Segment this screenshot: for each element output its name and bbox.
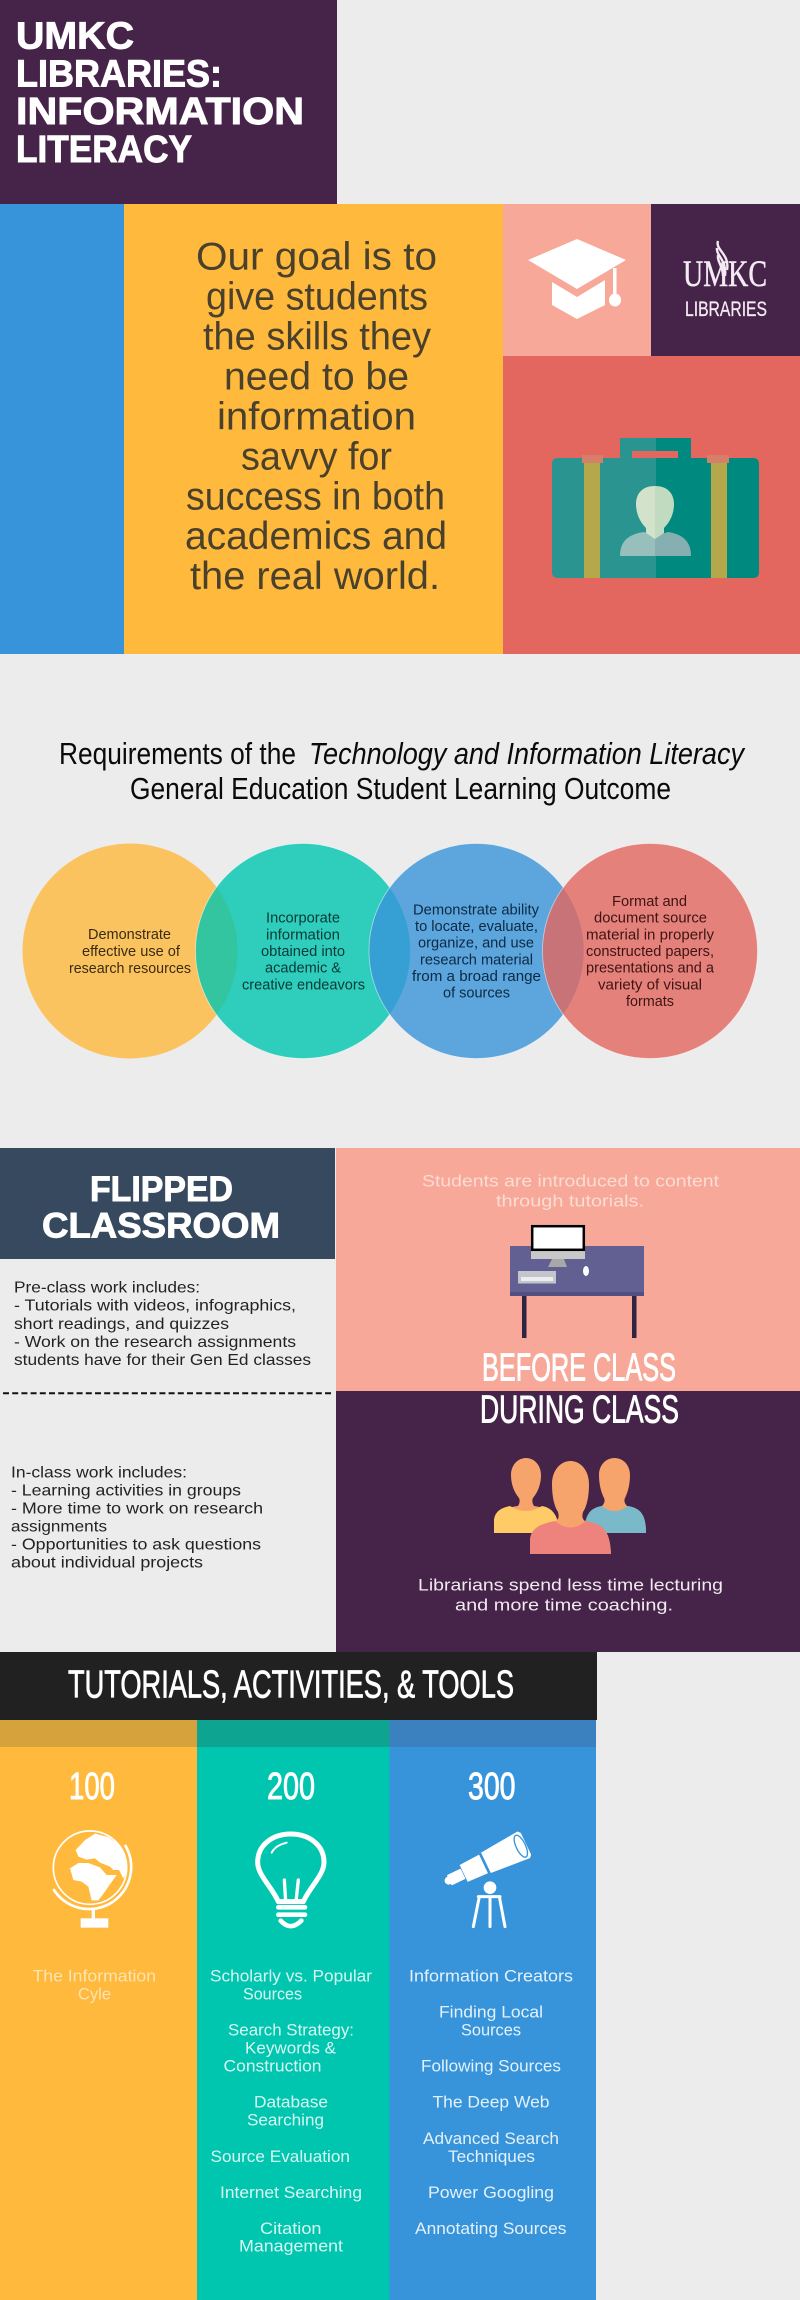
circle text: incorporate: academic & [265,960,341,977]
circle text: incorporate: creative endeavors [242,976,365,993]
panel: tutorials columns [0,1652,597,2300]
title: LIBRARIES: [16,53,222,95]
goal statement: Our goal is to [196,235,437,278]
list: level 200 tutorials: Search Strategy: [228,2021,354,2040]
icon: light bulb [258,1834,324,1926]
circle text: format and document: formats [626,993,674,1010]
list: level 200 tutorials: Source Evaluation [210,2147,350,2166]
requirements heading: Requirements of the [59,736,296,771]
logo wordmark [683,254,767,321]
icon: logo flame [717,241,727,276]
icon: telescope [439,1830,532,1927]
logo wordmark: UMKC [683,254,767,295]
list: level 200 tutorials: Keywords & [245,2038,337,2057]
icon: graduation cap [528,239,626,319]
circle text: effective use: research resources [69,960,191,977]
during class description: and more time coaching. [455,1596,673,1615]
flipped classroom title: CLASSROOM [42,1206,280,1245]
circle text: locate and evaluate: from a broad range [412,968,541,985]
heading bar: tutorials, activities and tools: TUTORIALS, ACTIVITIES, & TOOLS [68,1664,514,1707]
circle text: incorporate [242,910,365,993]
circle text: incorporate: Incorporate [266,910,340,927]
list: level 100 tutorials: Cyle [78,1984,111,2004]
panel: briefcase [503,356,800,654]
goal statement: need to be [224,355,409,398]
circle text: effective use [69,926,191,977]
during class heading: DURING CLASS [480,1389,679,1432]
list: level 200 tutorials: Internet Searching [220,2183,362,2202]
during class description [418,1576,723,1615]
circle text: locate and evaluate: to locate, evaluate, [415,918,538,935]
list: level 200 tutorials: Management [239,2237,343,2256]
text block: pre-class work: - Tutorials with videos, infographics, [14,1298,296,1315]
title: INFORMATION [16,91,304,133]
level numbers: 100 [69,1766,115,1808]
goal statement: the real world. [190,555,440,598]
before class heading: BEFORE CLASS [482,1347,676,1390]
list: level 300 tutorials: Information Creators [409,1967,573,1986]
list: level 300 tutorials: Annotating Sources [415,2219,566,2238]
flipped classroom title: FLIPPED [90,1170,233,1209]
list: level 100 tutorials [32,1967,156,2004]
level numbers: 200 [267,1766,315,1808]
goal statement: success in both [186,475,445,518]
text block: pre-class work: - Work on the research assignments [14,1334,296,1351]
circle text: format and document: presentations and a [586,960,715,977]
before class description [422,1172,719,1211]
before class description: Students are introduced to content [422,1172,719,1191]
list: level 300 tutorials: Power Googling [428,2183,554,2202]
circle text: format and document: document source [594,910,707,927]
requirements heading [59,736,746,806]
circle text: format and document: variety of visual [598,976,702,993]
text block: in-class work: assignments [11,1519,107,1536]
text block: pre-class work: short readings, and quizzes [14,1316,229,1333]
requirements heading: Technology and Information Literacy [309,736,746,771]
list: level 200 tutorials: Database [254,2093,328,2112]
heading bar: tutorials, activities and tools [0,1652,597,1720]
text block: in-class work: about individual projects [11,1555,203,1572]
list: level 300 tutorials: Advanced Search [423,2129,559,2148]
list: level 200 tutorials: Scholarly vs. Popular [210,1967,372,1986]
circle text: locate and evaluate: Demonstrate ability [413,901,539,918]
text block: pre-class work: Pre-class work includes: [14,1280,200,1297]
goal statement [185,235,447,598]
goal statement: give students [206,275,428,318]
icon: group of people [494,1458,646,1554]
goal statement: savvy for [241,435,392,478]
list: level 300 tutorials: Sources [461,2021,521,2040]
text block: in-class work: - More time to work on research [11,1500,263,1517]
circle text: locate and evaluate [412,901,541,1002]
title: UMKC [16,15,134,57]
icon: desk with computer [510,1226,644,1338]
text block: in-class work [11,1464,263,1572]
circle text: format and document [586,893,715,1010]
text block: in-class work: - Learning activities in groups [11,1482,241,1499]
list: level 300 tutorials: The Deep Web [432,2093,550,2112]
circle text: incorporate: information [266,926,340,943]
text block: pre-class work: students have for their Gen Ed classes [14,1352,311,1369]
circle text: locate and evaluate: organize, and use [418,935,534,952]
chart: four overlapping outcome circles [22,844,758,1058]
text block: pre-class work [14,1280,311,1369]
list: level 200 tutorials: Citation [260,2219,322,2238]
level numbers [69,1766,516,1808]
panel: UMKC Libraries logo [651,204,800,356]
panel: during class [336,1389,800,1652]
title [16,15,304,171]
goal statement: academics and [185,515,447,558]
list: level 200 tutorials: Searching [247,2110,324,2130]
circle text: effective use: effective use of [82,943,181,960]
before class description: through tutorials. [496,1192,644,1211]
text block: in-class work: - Opportunities to ask questions [11,1537,261,1554]
circle text: format and document: material in properly [586,926,714,943]
list: level 200 tutorials: Construction [224,2057,322,2076]
circle text: locate and evaluate: of sources [443,985,510,1002]
title: LITERACY [16,129,192,171]
text block: in-class work: In-class work includes: [11,1464,187,1481]
goal statement: the skills they [203,315,431,358]
requirements heading: General Education Student Learning Outcome [130,771,671,806]
panel: goal hero [0,204,503,654]
icon: globe [53,1831,131,1928]
during class description: Librarians spend less time lecturing [418,1576,723,1595]
panel: graduation cap [503,204,651,356]
list: level 200 tutorials: Sources [243,1984,302,2004]
circle text: effective use: Demonstrate [88,926,171,943]
list: level 300 tutorials: Following Sources [421,2057,561,2076]
list: level 200 tutorials [210,1967,372,2256]
list: level 300 tutorials: Finding Local [439,2003,543,2022]
circle text: incorporate: obtained into [261,943,345,960]
icon: briefcase with person [552,438,759,578]
logo wordmark: LIBRARIES [685,298,767,321]
list: level 300 tutorials [409,1967,573,2238]
list: level 300 tutorials: Techniques [448,2147,535,2166]
panel: title [0,0,337,204]
goal statement: information [217,395,416,438]
panel: flipped classroom heading [0,1148,335,1259]
circle text: locate and evaluate: research material [420,951,533,968]
panel: before class [336,1148,800,1391]
list: level 100 tutorials: The Information [32,1967,156,1986]
level numbers: 300 [468,1766,516,1808]
circle text: format and document: Format and [612,893,687,910]
flipped classroom title [42,1170,280,1245]
circle text: format and document: constructed papers, [586,943,714,960]
